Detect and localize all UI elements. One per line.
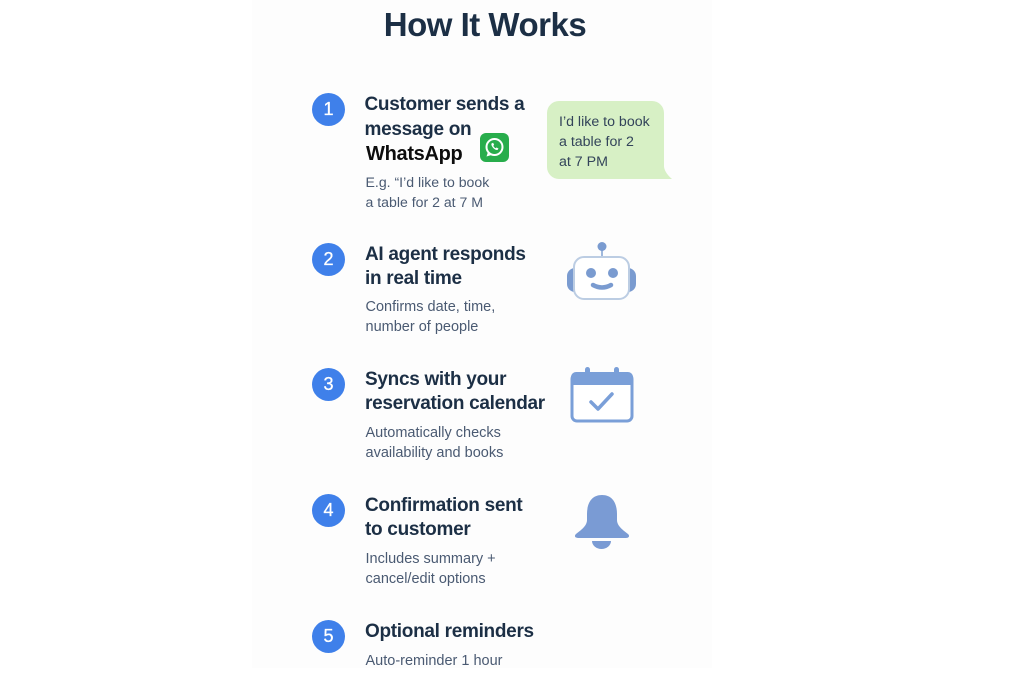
step 2 heading: AI agent responds [365, 244, 526, 264]
step 4 [312, 494, 629, 587]
step 2 description: number of people [366, 319, 478, 335]
step 2 heading: in real time [365, 268, 462, 289]
step 3 description: Automatically checks [366, 425, 501, 441]
step 1 heading: Customer sends a [364, 94, 524, 115]
step 1 heading: message on [364, 118, 471, 140]
step 2 description [366, 299, 495, 335]
title: How It Works [384, 6, 586, 43]
chat bubble [547, 101, 672, 179]
number badge 2 [312, 243, 345, 276]
background panel [252, 0, 712, 668]
number badge 5 [312, 620, 345, 653]
icon: bell [575, 495, 629, 549]
step 3 heading [365, 368, 545, 414]
step 1 description: a table for 2 at 7 M [366, 194, 483, 210]
number badge 5: 5 [323, 626, 334, 646]
step 4 description [366, 551, 496, 587]
icon: WhatsApp [480, 133, 509, 162]
step 4 description: Includes summary + [366, 551, 496, 567]
number badge 3 [312, 368, 345, 401]
step 2 heading [365, 244, 526, 289]
bubble text: a table for 2 [559, 134, 634, 150]
step 1 heading [364, 94, 525, 165]
step 4 heading: Confirmation sent [365, 494, 522, 516]
step 4 heading: to customer [365, 519, 470, 540]
number badge 1 [312, 93, 345, 126]
step 1 description: E.g. “I’d like to book [366, 174, 489, 190]
step 1 description [366, 174, 490, 210]
step 5 [312, 620, 534, 668]
step 3 heading: reservation calendar [365, 393, 545, 414]
step 5 heading: Optional reminders [365, 621, 534, 642]
bubble text: I’d like to book [559, 114, 650, 130]
step 3 description: availability and books [366, 445, 503, 461]
icon: calendar [570, 367, 634, 422]
number badge 1: 1 [323, 99, 334, 119]
number badge 2: 2 [323, 249, 334, 269]
icon: robot [567, 242, 636, 300]
number badge 4: 4 [323, 500, 334, 520]
bubble text: at 7 PM [559, 154, 608, 170]
step 1 heading: WhatsApp [366, 143, 462, 165]
step 1 [312, 93, 672, 210]
step 4 heading [365, 494, 522, 540]
step 4 description: cancel/edit options [366, 571, 486, 587]
step 3 [312, 367, 634, 461]
step 3 heading: Syncs with your [365, 368, 506, 390]
step 2 [312, 242, 636, 335]
number badge 3: 3 [323, 374, 334, 394]
number badge 4 [312, 494, 345, 527]
step 2 description: Confirms date, time, [366, 299, 495, 315]
step 3 description [366, 425, 503, 461]
bubble text [559, 114, 650, 170]
